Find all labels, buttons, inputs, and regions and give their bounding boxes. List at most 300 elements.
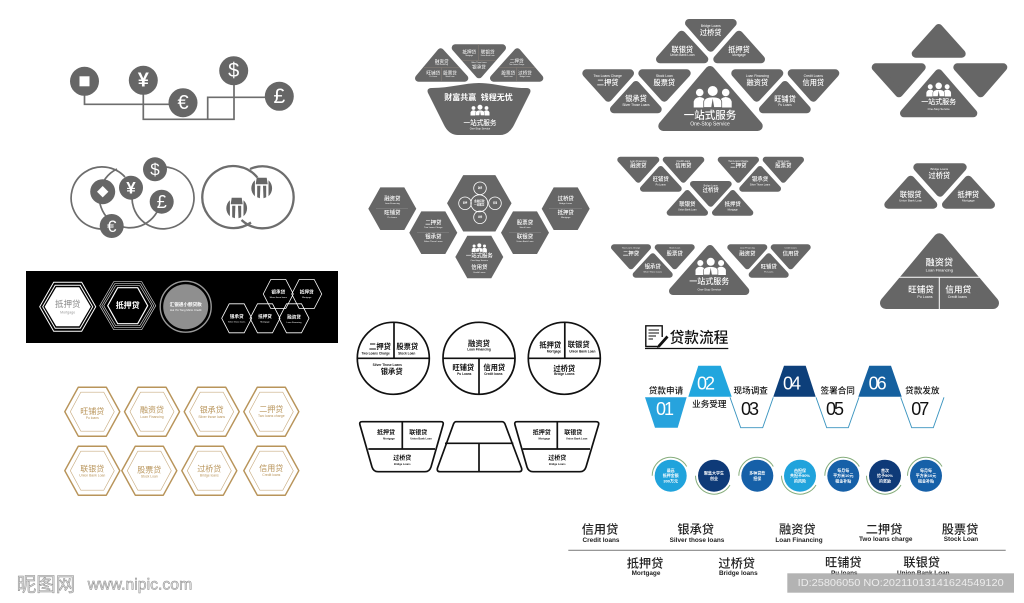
badge: grey circle: Hui Yin Tong Micro Credit <box>170 308 202 312</box>
trapezoid: mortgage, union, bridge right <box>515 422 599 472</box>
badge: linked small hexagons: 抵押贷 <box>258 313 272 320</box>
triangle: loan financing: 融资贷 <box>747 78 768 87</box>
circle 6: 的奖励 <box>879 478 891 484</box>
triangle: one-stop service <box>904 73 973 113</box>
trapezoid: mortgage, union, bridge right: 过桥贷 <box>548 454 566 462</box>
icon: currency flow network: £ <box>273 85 285 108</box>
circle: second mortgage, stock, silver: Silver Those Loans <box>373 363 402 367</box>
step 07: 07 <box>911 399 929 419</box>
circle: mortgage, union, bridge: Bridge Loans <box>554 372 575 376</box>
triangle: credit loan <box>666 160 701 180</box>
triangle: stock loan <box>658 246 692 266</box>
panel: gold hexagon badges: 融资贷 <box>140 404 164 414</box>
panel: gold hexagon badges: Pu loans <box>86 416 99 420</box>
watermark: site logo: www.nipic.com <box>87 576 192 594</box>
triangle: union bank loan <box>888 180 933 205</box>
triangle: stock loan: 股票贷 <box>654 78 675 87</box>
triangle: Pu loans: Pu Loans <box>778 103 792 107</box>
panel: bottom loan type list: Union Bank Loan <box>897 570 950 577</box>
panel: split large triangle: 旺铺贷 <box>908 283 934 294</box>
hexagon: loan financing and Pu loans: 融资贷 <box>384 194 401 202</box>
circle: financing, Pu, credit: Credit loans <box>484 372 503 376</box>
hexagon: one-stop service and credit loan: Credit Loans <box>473 271 486 274</box>
circle: mortgage, union, bridge: 联银贷 <box>568 340 590 349</box>
panel: bottom loan type list <box>568 521 1006 577</box>
circle 3: 担保 <box>753 475 761 481</box>
triangle: one-stop service <box>663 71 758 128</box>
hexagon: loan financing and Pu loans: 旺铺贷 <box>384 208 401 216</box>
panel: gold hexagon badges: 股票贷 <box>137 464 161 474</box>
trapezoid: mortgage, union, bridge left: Bridge Loans <box>394 462 411 466</box>
hexagon: bridge and mortgage loans: 过桥贷 <box>558 194 574 202</box>
triangle: credit loan: 信用贷 <box>783 249 799 257</box>
panel: gold hexagon badges: Silver those loans <box>198 415 225 419</box>
badge: grey circle <box>160 281 211 332</box>
panel: gold hexagon badges: Two loans charge <box>258 414 285 418</box>
triangle: bridge loan <box>689 23 733 48</box>
badge: linked small hexagons <box>222 280 322 333</box>
step 04: 04 <box>783 373 801 393</box>
triangle: left loans <box>418 52 465 81</box>
panel: outlined trapezoid diagrams <box>360 422 599 472</box>
trapezoid: mortgage, union, bridge right: Mortgage <box>538 436 551 440</box>
hexagon: bridge and mortgage loans: 抵押贷 <box>558 208 574 216</box>
panel: split large triangle: 融资贷 <box>926 256 953 267</box>
hexagon: stock and union bank loans: 联银贷 <box>517 232 534 240</box>
circle: mortgage, union, bridge: 过桥贷 <box>553 364 576 373</box>
hexagon: one-stop service and credit loan: One-Stop Service <box>471 259 489 262</box>
circle: mortgage, union, bridge <box>528 322 600 394</box>
step 06: 06 <box>869 373 887 393</box>
trapezoid: mortgage, union, bridge left <box>360 422 443 472</box>
panel: gold hexagon badges: 银承贷 <box>200 404 224 414</box>
panel: bottom loan type list: 联银贷 <box>903 555 940 570</box>
hexagon: service circles: 信用 <box>493 200 497 204</box>
triangle: loan financing: Loan Financing <box>746 74 769 78</box>
badge: linked small hexagons: Silver those loans <box>228 320 246 324</box>
triangle: left loans: Stock Loan <box>446 75 454 78</box>
triangle: Pu loans <box>763 85 807 109</box>
circle 4: 由担保 <box>794 467 806 473</box>
step 03: 03 <box>741 399 759 419</box>
circle 2: 创业 <box>710 475 718 481</box>
triangle: one-stop service: 一站式服务 <box>689 276 729 286</box>
hexagon: service circles <box>448 176 511 231</box>
hexagon: loan financing and Pu loans: Pu Loans <box>388 217 398 219</box>
circle 1: 抵押金额 <box>663 472 679 478</box>
circle 4: 共担不50% <box>790 472 810 478</box>
panel: seven-triangle one-stop group <box>614 246 808 291</box>
badge: linked small hexagons: Mortgage <box>260 320 270 324</box>
hexagon: one-stop service and credit loan: 信用贷 <box>471 263 488 271</box>
triangle: silver loan: Silver Those Loans <box>750 184 771 186</box>
triangle: union bank loan <box>660 35 704 59</box>
trapezoid: mortgage, union, bridge right: 抵押贷 <box>533 428 551 436</box>
step 01 <box>645 384 687 428</box>
triangle: bridge loan: 过桥贷 <box>700 28 721 37</box>
triangle: stock loan: Stock Loan <box>777 160 790 163</box>
triangle: mortgage: 抵押贷 <box>958 190 979 199</box>
triangle: left loans: 旺铺贷 <box>426 70 441 76</box>
triangle: right loans: Bridge Loans <box>520 76 530 78</box>
triangle: Pu loans: Pu Loans <box>656 184 667 186</box>
panel: bottom loan type list: 抵押贷 <box>627 555 663 570</box>
triangle: right loans: Stock Loan <box>504 75 513 78</box>
trapezoid: mortgage, union, bridge left: 联银贷 <box>409 428 427 436</box>
hexagon: second mortgage and silver loans: Two Loans Charge <box>424 226 443 229</box>
step 05: 05 <box>826 399 844 419</box>
triangle: mortgage: Mortgage <box>732 53 746 57</box>
panel: nine-triangle group <box>620 160 801 213</box>
panel: split large triangle: 信用贷 <box>945 283 972 294</box>
hexagon: second mortgage and silver loans: Silver Those Loans <box>424 240 444 243</box>
step 05 <box>816 384 859 428</box>
watermark: image id bar: ID:25806050 NO:20211013141624549120 <box>798 577 1004 589</box>
shape: slogan and one-stop service: One-Stop Service <box>470 127 491 131</box>
icon: document and pen <box>646 326 668 348</box>
panel: gold hexagon badges: Credit loans <box>262 473 281 477</box>
triangle: mortgage <box>717 35 761 59</box>
hexagon: service circles: 过桥 <box>478 214 483 218</box>
step 01: 贷款申请 <box>649 384 684 395</box>
shape: slogan and one-stop service <box>428 83 530 135</box>
triangle: stock loan: 股票贷 <box>775 162 792 170</box>
triangle: bridge loan: 过桥贷 <box>929 171 950 180</box>
triangle: silver loan <box>636 256 670 275</box>
triangle: loan financing: Loan Financing <box>740 248 756 250</box>
step 06 <box>858 366 902 397</box>
triangle: second mortgage: 二押贷 <box>597 78 618 87</box>
triangle: silver loan: 银承贷 <box>645 263 661 271</box>
triangle: bridge loan: Bridge Loans <box>701 24 721 28</box>
hexagon: second mortgage and silver loans <box>409 211 457 254</box>
triangle: left loans: Loan Financing <box>436 64 448 66</box>
triangle: credit loan: 信用贷 <box>803 78 824 87</box>
triangle: loan financing <box>620 160 656 180</box>
triangle: bridge loan: Bridge Loans <box>930 167 949 171</box>
triangle: left loans: 股票贷 <box>443 70 457 76</box>
circle 5: 租金补贴 <box>835 478 851 484</box>
triangle: Pu loans: Pu Loans <box>764 272 774 274</box>
watermark: image id bar <box>787 573 1014 593</box>
panel: gold hexagon badges: Loan Financing <box>140 415 164 419</box>
step 03 <box>730 384 773 428</box>
hexagon: bridge and mortgage loans <box>542 187 590 230</box>
triangle: second mortgage: Two Loans Charge <box>593 74 622 78</box>
triangle: one-stop service: 一站式服务 <box>921 97 956 106</box>
triangle: stock loan <box>766 160 801 180</box>
icon: overlapping currency circles <box>71 157 194 238</box>
badge: grey circle: 汇银通小额贷款 <box>170 301 202 308</box>
badge: outlined hexagon mortgage <box>100 282 156 330</box>
circle: financing, Pu, credit: Pu Loans <box>457 372 472 376</box>
panel: bottom loan type list: Pu loans <box>831 570 858 577</box>
panel: black banner <box>26 271 338 343</box>
panel: bottom loan type list: Two loans charge <box>859 536 913 543</box>
triangle: loan financing <box>730 247 764 266</box>
triangle: mortgage: 抵押贷 <box>728 45 750 54</box>
triangle: credit loan: Credit Loans <box>804 74 823 78</box>
triangle: right loans: 股票贷 <box>501 70 516 76</box>
trapezoid: mortgage, union, bridge left: 抵押贷 <box>377 428 395 436</box>
panel: bottom loan type list: 旺铺贷 <box>825 555 862 570</box>
triangle: centre loans: 银承贷 <box>472 64 486 70</box>
triangle: bridge loan: Bridge Loans <box>704 184 719 188</box>
hexagon: second mortgage and silver loans: 二押贷 <box>425 218 442 226</box>
hexagon: loan financing and Pu loans <box>368 187 416 230</box>
trapezoid: mortgage, union, bridge left: Union Bank Loan <box>410 436 432 440</box>
circle 5: 每月每 <box>837 467 849 473</box>
panel: bottom loan type list: Credit loans <box>583 537 620 544</box>
panel: split large triangle: Credit loans <box>948 295 967 299</box>
triangle: Pu loans: 旺铺贷 <box>761 263 777 271</box>
circle 3: 多种贷款 <box>749 470 765 476</box>
panel: bottom loan type list: Bridge loans <box>719 570 758 577</box>
triangle: centre loans: 联银贷 <box>481 48 495 56</box>
icon: currency flow network: € <box>177 92 189 114</box>
trapezoid: mortgage, union, bridge right: Bridge Loans <box>549 462 566 466</box>
hexagon: stock and union bank loans: Union Bank Loan <box>517 241 534 243</box>
circle 7: 每月每 <box>920 467 932 473</box>
panel: gold hexagon badges: 二押贷 <box>259 404 283 414</box>
triangle: union bank loan: 联银贷 <box>900 190 921 199</box>
triangle: bridge loan <box>693 184 729 204</box>
badge: white hexagon mortgage <box>40 282 96 331</box>
triangle: silver loan <box>742 169 778 189</box>
circle: financing, Pu, credit: 信用贷 <box>483 363 506 372</box>
triangle: union bank loan: Union Bank Loan <box>899 198 923 202</box>
triangle: second mortgage: 二押贷 <box>730 162 747 170</box>
triangle: credit loan: Credit Loans <box>677 160 691 163</box>
triangle: one-stop service <box>673 249 745 291</box>
heading: loan process <box>645 326 729 348</box>
circle 6: 给予50% <box>877 472 893 478</box>
circle 7: 平方米10元 <box>916 472 936 478</box>
circle 7 <box>908 457 942 492</box>
circle 2: 聚集大学生 <box>704 470 724 476</box>
triangle: union bank loan <box>670 193 705 213</box>
circle 6: 首次 <box>881 467 889 473</box>
step 02 <box>688 366 732 409</box>
hexagon: second mortgage and silver loans: 银承贷 <box>425 232 442 240</box>
triangle: mortgage: Mortgage <box>962 198 975 202</box>
triangle: union bank loan: Union Bank Loan <box>678 208 697 212</box>
circle 1: 300万元 <box>663 478 678 484</box>
triangle: one-stop service: 一站式服务 <box>684 109 737 122</box>
step 07 <box>901 384 944 428</box>
circle: financing, Pu, credit: 融资贷 <box>468 339 491 348</box>
panel: split large triangle: Pu Loans <box>917 295 933 299</box>
triangle: silver loan: 银承贷 <box>625 94 647 103</box>
circle: financing, Pu, credit: Loan Financing <box>467 347 491 351</box>
triangle: Pu loans: 旺铺贷 <box>774 94 796 104</box>
panel: bottom loan type list: 过桥贷 <box>718 555 755 570</box>
triangle: centre loans <box>455 44 502 75</box>
circle: second mortgage, stock, silver <box>357 322 429 394</box>
triangle: mortgage <box>946 180 991 205</box>
triangle: top <box>916 28 962 54</box>
panel: gold hexagon badges <box>65 387 299 495</box>
triangle: loan financing: Loan Financing <box>630 160 647 163</box>
trapezoid: mortgage, union, bridge right: Union Bank Loan <box>566 436 588 440</box>
circle 5 <box>825 457 859 492</box>
triangle: right loans: Two Loans Charge <box>509 64 524 66</box>
badge: white hexagon mortgage: 抵押贷 <box>55 299 81 309</box>
hexagon: bridge and mortgage loans: Mortgage <box>561 216 571 219</box>
panel: four-triangle star <box>876 28 1003 113</box>
triangle: credit loan <box>792 73 835 98</box>
hexagon: one-stop service and credit loan: 一站式服务 <box>466 252 493 260</box>
triangle: one-stop service: One-Stop Service <box>928 107 950 111</box>
step 04 <box>773 366 816 397</box>
triangle: second mortgage: Two Loans Charge <box>622 246 641 250</box>
triangle: one-stop service: One-Stop Service <box>697 287 721 291</box>
triangle: centre loans: 抵押贷 <box>462 48 477 56</box>
shape: slogan and one-stop service: 财富共赢 钱程无忧 <box>444 92 513 102</box>
triangle: silver loan: 银承贷 <box>752 175 769 183</box>
panel: bottom loan type list: Stock Loan <box>944 536 978 543</box>
circle 3 <box>739 457 773 492</box>
triangle: silver loan: Silver Those Loans <box>622 103 650 107</box>
icon: currency flow network <box>70 56 294 119</box>
step 01: 01 <box>656 399 674 419</box>
hexagon: service circles: 融资 <box>478 185 483 189</box>
panel: hexagon loan cluster <box>368 176 590 278</box>
icon: overlapping currency circles: € <box>107 217 117 236</box>
panel: bottom loan type list: Silver those loans <box>670 537 725 544</box>
step 02: 业务受理 <box>692 398 727 409</box>
panel: gold hexagon badges: Union Bank Loan <box>79 474 105 478</box>
panel: gold hexagon badges: 联银贷 <box>80 464 104 474</box>
panel: gold hexagon badges: Stock Loan <box>141 474 158 478</box>
panel: three-loan triangle group <box>888 167 991 205</box>
triangle: second mortgage <box>721 160 756 180</box>
triangle: second mortgage <box>614 246 648 266</box>
panel: gold hexagon badges: 旺铺贷 <box>80 406 104 416</box>
badge: outlined hexagon mortgage: 抵押贷 <box>116 300 140 310</box>
triangle: one-stop service: One-Stop Service <box>690 122 730 128</box>
shape: slogan and one-stop service: 一站式服务 <box>464 118 497 127</box>
triangle: stock loan: Stock Loan <box>669 246 681 250</box>
triangle: Pu loans: 旺铺贷 <box>653 175 669 183</box>
badge: linked small hexagons: 银承贷 <box>230 313 244 320</box>
hexagon: service circles: 金融贷款 <box>474 199 485 203</box>
circle: mortgage, union, bridge: Mortgage <box>547 349 561 353</box>
circle: second mortgage, stock, silver: 二押贷 <box>369 342 392 351</box>
triangle: right loans <box>494 52 540 81</box>
triangle: silver loan <box>614 85 658 109</box>
circle: second mortgage, stock, silver: 银承贷 <box>381 367 403 376</box>
circle 4 <box>782 460 816 494</box>
trapezoid: mortgage, union, bridge right: 联银贷 <box>564 428 582 436</box>
step 02: 02 <box>697 373 715 393</box>
circle: mortgage, union, bridge: Union Bank Loan <box>569 349 595 353</box>
triangle: bridge loan <box>917 167 963 193</box>
panel: one-stop service cluster with slogan <box>418 44 540 135</box>
panel: bottom loan type list: 银承贷 <box>677 521 714 536</box>
watermark: site logo <box>17 574 192 596</box>
trapezoid: empty middle <box>437 422 522 472</box>
panel: split large triangle: Loan Financing <box>926 268 953 272</box>
panel: bottom loan type list: Mortgage <box>632 570 661 577</box>
circle: second mortgage, stock, silver: Two Loans Charge <box>362 351 390 355</box>
icon: overlapping currency circles: $ <box>150 160 160 179</box>
heading: loan process: 贷款流程 <box>670 329 729 346</box>
triangle: Pu loans <box>643 169 679 189</box>
triangle: mortgage: 抵押贷 <box>725 200 741 208</box>
icon: currency flow network: $ <box>228 60 239 82</box>
badge: white hexagon mortgage: Mortgage <box>60 310 75 314</box>
icon: overlapping currency circles: £ <box>157 192 167 212</box>
hexagon: one-stop service and credit loan <box>455 236 503 278</box>
badge: linked small hexagons: 融资贷 <box>287 314 301 320</box>
badge: linked small hexagons: 银承贷 <box>271 288 286 296</box>
panel: gold hexagon badges: Bridge loans <box>200 474 219 478</box>
circle 6 <box>866 460 901 494</box>
triangle: silver loan: Silver Those Loans <box>643 271 663 274</box>
hexagon: service circles: 一站服务 <box>474 202 485 206</box>
triangle: union bank loan: Union Bank Loan <box>670 53 695 57</box>
triangle: stock loan <box>642 73 687 98</box>
circle 1 <box>652 457 687 492</box>
triangle: centre loans: Silver Those Loans <box>471 62 487 64</box>
triangle: union bank loan: 联银贷 <box>679 200 696 208</box>
circle: second mortgage, stock, silver: 股票贷 <box>396 342 419 351</box>
circle 5: 平方米10元 <box>833 472 854 478</box>
circle 7: 租金补贴 <box>918 478 934 484</box>
circle: mortgage, union, bridge: 抵押贷 <box>539 340 562 350</box>
triangle: left <box>876 67 922 93</box>
icon: two-circle coin link <box>202 166 294 228</box>
triangle: centre loans: Union Bank Loan <box>481 55 495 57</box>
triangle: stock loan: 股票贷 <box>667 249 683 257</box>
panel: bottom loan type list: 二押贷 <box>866 521 902 536</box>
panel: gold hexagon badges: 过桥贷 <box>197 464 221 474</box>
circle 2 <box>696 460 730 494</box>
panel: bottom loan type list: Loan Financing <box>775 537 823 544</box>
panel: split large triangle <box>886 239 993 310</box>
triangle: mortgage <box>715 193 750 213</box>
triangle: credit loan <box>774 246 808 266</box>
triangle: right loans: 过桥贷 <box>518 70 532 76</box>
trapezoid: mortgage, union, bridge left: 过桥贷 <box>393 454 411 462</box>
circle: financing, Pu, credit: 旺铺贷 <box>452 363 475 372</box>
badge: linked small hexagons: Loan Financing <box>287 322 302 324</box>
panel: bottom loan type list: 信用贷 <box>582 521 618 536</box>
triangle: right <box>957 67 1003 93</box>
hexagon: loan financing and Pu loans: Loan Financing <box>385 203 401 205</box>
hexagon: stock and union bank loans <box>501 211 549 254</box>
hexagon: bridge and mortgage loans: Bridge Loans <box>559 202 573 205</box>
circle: financing, Pu, credit <box>443 322 515 394</box>
icon: overlapping currency circles: ¥ <box>126 178 136 198</box>
triangle: second mortgage: Two Loans Charge <box>728 160 749 163</box>
trapezoid: mortgage, union, bridge left: Mortgage <box>383 436 395 440</box>
icon: currency flow network: ¥ <box>138 70 150 92</box>
panel: bottom loan type list: 融资贷 <box>779 521 816 536</box>
badge: linked small hexagons: Mortgage <box>302 296 312 299</box>
triangle: union bank loan: 联银贷 <box>672 45 693 54</box>
triangle: loan financing: 融资贷 <box>630 162 647 170</box>
triangle: bridge loan: 过桥贷 <box>703 186 719 194</box>
hexagon: service circles: 抵押 <box>463 200 468 204</box>
panel: outlined circle diagrams <box>357 322 600 394</box>
triangle: centre loans: Mortgage <box>466 54 473 57</box>
circle 4: 的风险 <box>794 478 806 484</box>
triangle: credit loan: Credit Loans <box>784 246 798 250</box>
triangle: loan financing: 融资贷 <box>739 249 756 257</box>
watermark: site logo: 昵图网 <box>17 574 75 596</box>
